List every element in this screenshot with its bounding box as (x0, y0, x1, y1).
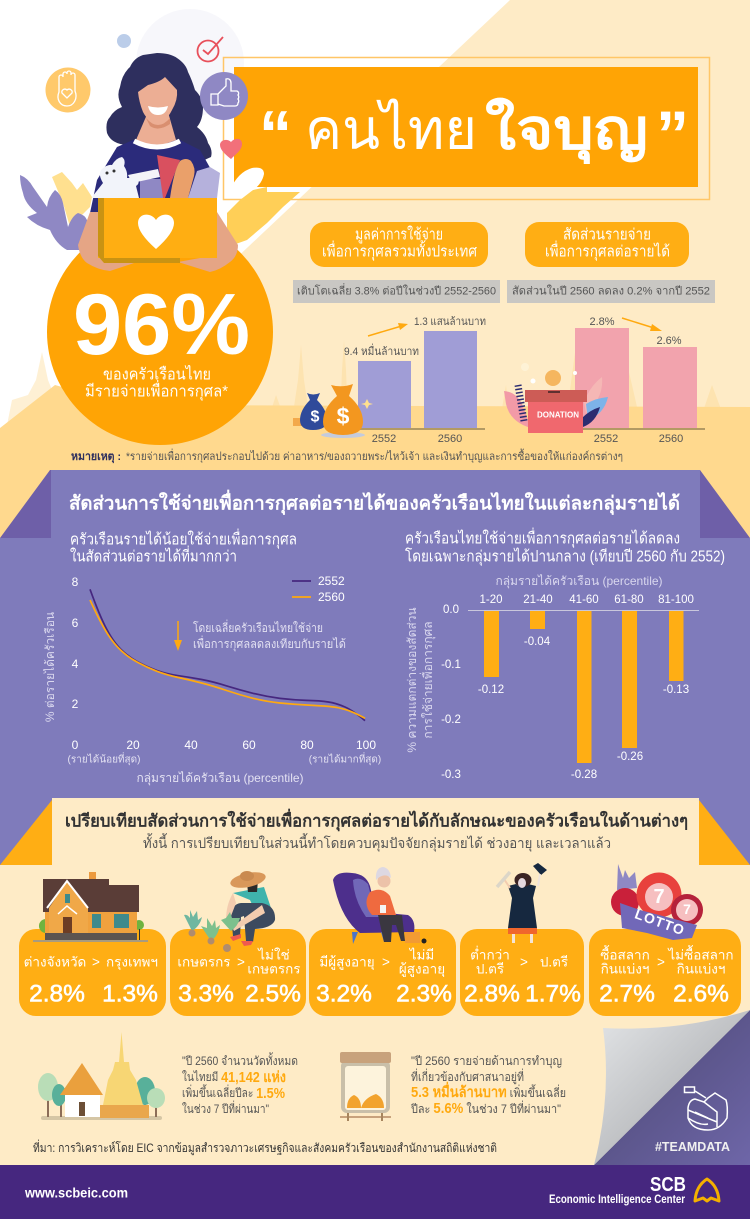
title text: ใจบุญ (485, 96, 648, 164)
arrow: growth (368, 323, 408, 336)
icon: money bags (293, 384, 373, 438)
pill heading: share of income: เพื่อการกุศลต่อรายได้ (545, 240, 670, 262)
text: merit spending fact: ที่เกี่ยวข้องกับศาสนาอยู่ที่ (411, 1068, 524, 1085)
panel: income share section (0, 470, 750, 865)
box heart (138, 215, 174, 249)
annotation text: โดยเฉลี่ยครัวเรือนไทยใช้จ่าย (193, 619, 323, 635)
card: elderly: มีผู้สูงอายุ (319, 954, 375, 970)
text: merit spending fact: ปีละ 5.6% ในช่วง 7 ปีที่ผ่านมา" (410, 1100, 561, 1117)
icon: lotto balls: 7 (683, 901, 691, 917)
line chart: % ต่อรายได้ครัวเรือน (43, 612, 57, 722)
bar chart: change by income group: 21-40 (523, 594, 553, 606)
icon: grandmother in armchair (333, 867, 426, 944)
icon: lotto balls: 7 (653, 886, 665, 908)
grey strip: share note: สัดส่วนในปี 2560 ลดลง 0.2% จากปี 2552 (512, 284, 710, 298)
text: temple fact: ในช่วง 7 ปีที่ผ่านมา" (182, 1100, 269, 1116)
arrow: decline (622, 318, 662, 331)
bar chart: total spending (344, 316, 486, 445)
bar chart: share of income: 2.6% (656, 335, 682, 347)
card: elderly: 2.3% (396, 980, 452, 1008)
bar chart: change by income group (405, 574, 699, 781)
text: temple fact: เพิ่มขึ้นเฉลี่ยปีละ 1.5% (182, 1084, 285, 1102)
note (71, 448, 623, 464)
grey strip: share note (507, 280, 715, 303)
icon: farmer (184, 869, 275, 952)
card: farmers: 2.5% (245, 980, 301, 1008)
icon: graduate (497, 863, 547, 943)
icon: monks donation box (340, 1052, 391, 1121)
bar chart: share of income (575, 316, 705, 445)
bar chart: change by income group: 0.0 (443, 604, 459, 616)
grey strip: growth note: เติบโตเฉลี่ย 3.8% ต่อปีในช่วงปี 2552-2560 (297, 282, 496, 298)
section flap right (700, 470, 750, 538)
icon: hand with heart (46, 68, 90, 112)
pill heading: total spending: มูลค่าการใช้จ่าย (355, 226, 443, 244)
note: *รายจ่ายเพื่อการกุศลประกอบไปด้วย ค่าอาหาร/ของถวายพระ/ไหว้เจ้า และเงินทำบุญและการซื้อของให้แก่องค์กรต่างๆ (126, 448, 623, 463)
bar chart: change by income group: -0.28 (571, 769, 597, 781)
panel: total spending (293, 222, 500, 445)
title text: คนไทย (305, 98, 477, 160)
line chart: 100 (356, 738, 376, 752)
text: merit spending fact: "ปี 2560 รายจ่ายด้านการทำบุญ (411, 1054, 562, 1069)
pill heading: share of income (525, 222, 689, 267)
icon: donation box (504, 363, 608, 433)
line chart: 2 (72, 697, 79, 711)
bar chart: share of income: 2552 (594, 433, 618, 445)
card: education: > (520, 954, 528, 970)
line chart: 80 (300, 738, 314, 752)
icon: money bags: $ (337, 403, 350, 429)
website: www.scbeic.com (24, 1186, 128, 1200)
icon: data chart (684, 1087, 727, 1130)
title text (259, 96, 689, 171)
card: education: ป.ตรี (540, 954, 568, 970)
card: lottery: 2.7% (599, 980, 655, 1008)
curve 2560 (90, 600, 365, 718)
line chart (43, 574, 381, 786)
legend: 2560 (318, 590, 345, 604)
bar chart: change by income group: % ความแตกต่างของสัดส่วน (405, 607, 419, 753)
annotation text: เพื่อการกุศลลดลงเทียบกับรายได้ (193, 635, 346, 652)
source: ที่มา: การวิเคราะห์โดย EIC จากข้อมูลสำรวจภาวะเศรษฐกิจและสังคมครัวเรือนของสำนักงานสถิติแห่งชาติ (33, 1139, 497, 1156)
icon: donation box: DONATION (537, 410, 579, 420)
bar chart: change by income group: 81-100 (658, 594, 694, 606)
background circle behind character (136, 9, 244, 117)
bar chart: change by income group: 61-80 (614, 594, 644, 606)
card: lottery: ไม่ซื้อสลาก (667, 944, 734, 962)
card: province vs Bangkok: 2.8% (29, 980, 85, 1008)
curve 2552 (90, 589, 365, 721)
title box (234, 67, 698, 187)
water bottle (188, 167, 220, 198)
teddy bear (92, 157, 139, 198)
text: merit spending fact: 5.3 หมื่นล้านบาท เพิ่มขึ้นเฉลี่ย (411, 1081, 566, 1101)
card: elderly: ผู้สูงอายุ (399, 962, 445, 978)
bar chart heading (405, 528, 725, 566)
card: education: ต่ำกว่า (470, 946, 510, 962)
face (138, 77, 177, 123)
bar chart: total spending: 1.3 แสนล้านบาท (414, 316, 486, 328)
hair (106, 53, 212, 162)
bar chart: total spending: 2560 (438, 433, 462, 445)
card: lottery: กินแบ่งฯ (677, 962, 725, 976)
card: province vs Bangkok: 1.3% (102, 980, 158, 1008)
#TEAMDATA label: #TEAMDATA (655, 1140, 730, 1154)
card: elderly: 3.2% (316, 980, 372, 1008)
baguette (170, 159, 195, 198)
annotation arrow (174, 621, 182, 651)
icon: check mark (198, 37, 223, 62)
SCB wordmark: Economic Intelligence Center (549, 1192, 685, 1206)
plants (184, 910, 202, 931)
bar chart: change by income group: -0.2 (441, 714, 461, 726)
card: province vs Bangkok (19, 929, 166, 1016)
pill heading: total spending: เพื่อการกุศลรวมทั้งประเทศ (322, 240, 477, 262)
icon: temple (38, 1032, 165, 1120)
bar chart: change by income group: -0.3 (441, 769, 461, 781)
card: farmers: 3.3% (178, 980, 234, 1008)
card: lottery: 2.6% (673, 980, 729, 1008)
circle caption: ของครัวเรือนไทย (103, 364, 211, 384)
bar chart: change by income group: 41-60 (569, 594, 599, 606)
chin shadow (146, 118, 170, 129)
card: education: 1.7% (525, 980, 581, 1008)
96% figure: 96% (73, 277, 250, 373)
bar chart: change by income group: การใช้จ่ายเพื่อการกุศล (419, 621, 436, 739)
text: merit spending fact (410, 1054, 566, 1117)
character: woman holding donation box (78, 53, 238, 272)
banner heading: เปรียบเทียบสัดส่วนการใช้จ่ายเพื่อการกุศลต่อรายได้กับลักษณะของครัวเรือนในด้านต่างๆ (65, 808, 688, 832)
box front (98, 198, 217, 258)
footer (0, 1165, 750, 1219)
pill heading: total spending (310, 222, 488, 267)
card: lottery (589, 929, 741, 1016)
bar chart: total spending: 9.4 หมื่นล้านบาท (344, 343, 419, 358)
icon: house (33, 872, 148, 942)
icon: lotto balls: LOTTO (633, 906, 687, 938)
page fold with teamdata (594, 1010, 750, 1165)
card: elderly: ไม่มี (409, 948, 434, 962)
legend (292, 574, 345, 604)
text: temple fact (182, 1052, 298, 1116)
title text: “ (259, 97, 292, 171)
line chart: 6 (72, 616, 79, 630)
card: farmers: > (237, 954, 245, 970)
icon: money bags: $ (311, 408, 320, 426)
grey strip: growth note (293, 280, 500, 303)
panel: share of income (504, 222, 715, 445)
bar chart: change by income group: 1-20 (479, 594, 503, 606)
card: education (460, 929, 584, 1016)
text: temple fact: ในไทยมี 41,142 แห่ง (182, 1068, 286, 1086)
banner (0, 798, 750, 865)
icon: lotto balls (611, 864, 703, 940)
card: farmers: เกษตรกร (177, 954, 231, 970)
text: temple fact: "ปี 2560 จำนวนวัดทั้งหมด (182, 1052, 298, 1068)
card: elderly: > (382, 954, 390, 970)
book (140, 179, 164, 198)
line chart: 60 (242, 738, 256, 752)
panel: household comparison (0, 798, 750, 1165)
line chart: (รายได้น้อยที่สุด) (68, 752, 140, 766)
bar chart: share of income: 2.8% (589, 316, 615, 328)
bar chart: change by income group: -0.12 (478, 684, 504, 696)
icon: heart (220, 139, 242, 159)
line chart: 40 (184, 738, 198, 752)
collar (134, 141, 180, 147)
SCB wordmark (549, 1174, 686, 1206)
bar chart: change by income group: -0.13 (663, 684, 689, 696)
bar chart: share of income: 2560 (659, 433, 683, 445)
line chart: 4 (72, 657, 79, 671)
card: province vs Bangkok: กรุงเทพฯ (106, 954, 158, 970)
bar chart heading: ครัวเรือนไทยใช้จ่ายเพื่อการกุศลต่อรายได้ลดลง (405, 528, 680, 548)
neck (136, 112, 176, 147)
section heading: สัดส่วนการใช้จ่ายเพื่อการกุศลต่อรายได้ของครัวเรือนไทยในแต่ละกลุ่มรายได้ (69, 490, 680, 516)
96% orange circle (47, 219, 273, 445)
line chart heading: ครัวเรือนรายได้น้อยใช้จ่ายเพื่อการกุศล (70, 528, 297, 550)
bar chart: change by income group: -0.26 (617, 751, 643, 763)
title frame (224, 58, 710, 200)
line chart: 8 (72, 575, 79, 589)
card: education: ป.ตรี (476, 962, 504, 976)
icon: decorative dot (117, 34, 131, 48)
bar chart: change by income group: -0.04 (524, 636, 551, 648)
card: lottery: > (657, 954, 665, 970)
96% orange circle: มีรายจ่ายเพื่อการกุศล* (85, 380, 228, 402)
card: farmers: เกษตรกร (247, 962, 301, 976)
title text: ” (656, 97, 689, 171)
line chart: 0 (72, 738, 79, 752)
line chart heading: ในสัดส่วนต่อรายได้ที่มากกว่า (70, 546, 237, 566)
card: farmers (170, 929, 306, 1016)
SCB wordmark: SCB (650, 1174, 686, 1196)
legend: 2552 (318, 574, 345, 588)
shirt (90, 140, 217, 213)
line chart heading (70, 528, 297, 566)
red carton (157, 155, 180, 198)
card: province vs Bangkok: ต่างจังหวัด (24, 954, 86, 970)
bar chart: change by income group: -0.1 (441, 659, 461, 671)
card: education: 2.8% (464, 980, 520, 1008)
annotation text (193, 619, 346, 652)
card: lottery: กินแบ่งฯ (601, 962, 649, 976)
line chart: 20 (126, 738, 140, 752)
card: farmers: ไม่ใช่ (257, 946, 290, 962)
card: province vs Bangkok: > (92, 954, 100, 970)
banner subheading: ทั้งนี้ การเปรียบเทียบในส่วนนี้ทำโดยควบคุมปัจจัยกลุ่มรายได้ ช่วงอายุ และเวลาแล้ว (143, 833, 611, 852)
forearms (78, 212, 137, 271)
smile (148, 106, 168, 115)
section flap left (0, 470, 51, 538)
bar chart: change by income group: กลุ่มรายได้ครัวเรือน (percentile) (495, 574, 663, 589)
bar chart: total spending: 2552 (372, 433, 396, 445)
SCB logo (695, 1179, 719, 1201)
icon: thumbs up (200, 72, 248, 120)
note: หมายเหตุ : (71, 451, 121, 464)
card: elderly (309, 929, 456, 1016)
card: lottery: ซื้อสลาก (600, 944, 650, 962)
pill heading: share of income: สัดส่วนรายจ่าย (563, 226, 651, 244)
line chart: (รายได้มากที่สุด) (309, 752, 381, 766)
line chart: กลุ่มรายได้ครัวเรือน (percentile) (136, 771, 304, 786)
plants behind character (20, 168, 300, 250)
